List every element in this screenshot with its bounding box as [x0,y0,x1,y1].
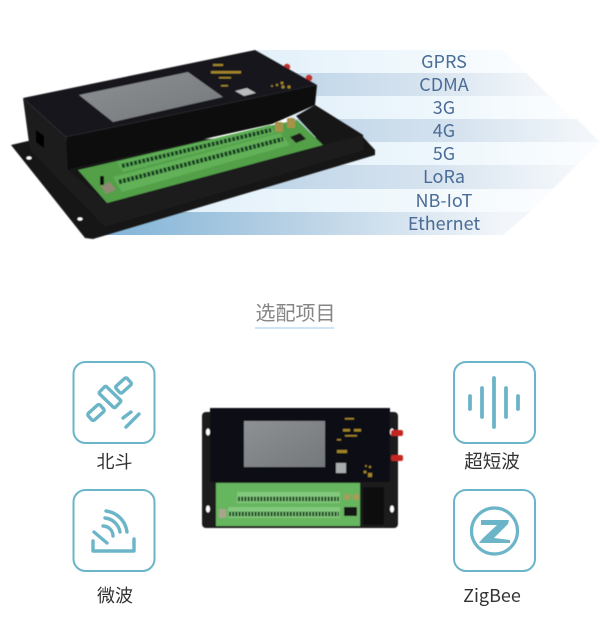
power switch [344,507,357,516]
device: angled RTU photo [11,50,375,239]
green circuit board [78,120,323,203]
top face of box [23,50,317,137]
label: 超短波 [464,448,520,474]
yellow brand marks [337,418,372,477]
label: NB-IoT: NB-IoT [416,187,473,213]
icon: ZigBee logo [472,508,518,554]
icon tile [74,490,154,571]
icon tile [74,362,154,443]
power switch [290,133,306,143]
mounting flange [202,412,398,528]
touch screen [244,421,325,467]
gold connectors [344,494,359,500]
icon: sound wave bars [470,378,518,427]
red antenna connectors [284,64,312,81]
body side and base [23,98,364,227]
band: CDMA [270,73,550,96]
band: 5G [290,142,600,165]
band: LoRa [250,165,577,189]
label: 微波 [97,582,133,608]
gold connectors [275,118,295,132]
label: 3G: 3G [433,94,455,120]
red antenna connectors [391,430,403,461]
front face of top box [66,85,317,170]
terminal strip lower [228,507,340,518]
battery cover [363,487,384,525]
heading underline [255,327,334,329]
terminal strip lower [113,133,290,192]
top box [210,408,390,482]
label: GPRS: GPRS [421,48,467,74]
flange holes [206,428,394,512]
ground screw [219,509,226,518]
icon: microwave dish [93,511,134,551]
label: ZigBee [463,582,521,608]
band: 4G [290,119,600,142]
option: Microwave [74,490,154,608]
icon tile [454,490,535,571]
panel: connectivity arrow bands [100,50,600,235]
terminal strip upper [117,125,275,172]
label: 5G: 5G [433,140,455,166]
touch screen [79,72,223,122]
band: 3G [290,96,573,119]
device: front view RTU photo [202,408,403,528]
terminal strip upper [237,492,340,503]
band: NB-IoT [180,189,553,212]
band: Ethernet [100,212,530,235]
label: 4G: 4G [433,117,455,143]
label: LoRa: LoRa [423,163,465,189]
band: GPRS [255,50,526,73]
option: Beidou [74,362,154,474]
icon: satellite [87,377,139,427]
mounting flange [11,137,375,239]
QR code [235,88,256,96]
green circuit board [216,483,360,526]
flange holes [26,156,83,221]
option: ZigBee [454,490,535,608]
band labels [408,48,480,236]
label: 北斗 [96,448,132,474]
yellow brand marks [211,64,291,89]
option: Ultrashort wave [454,362,535,474]
heading [255,297,336,329]
heading text: 选配项目 [256,297,336,326]
ground screw and post [100,176,116,194]
label: Ethernet: Ethernet [408,210,480,236]
icon tile [454,362,535,443]
left port [36,130,44,148]
label: CDMA: CDMA [419,71,469,97]
tray cover on right [296,105,363,145]
QR code [336,463,346,473]
